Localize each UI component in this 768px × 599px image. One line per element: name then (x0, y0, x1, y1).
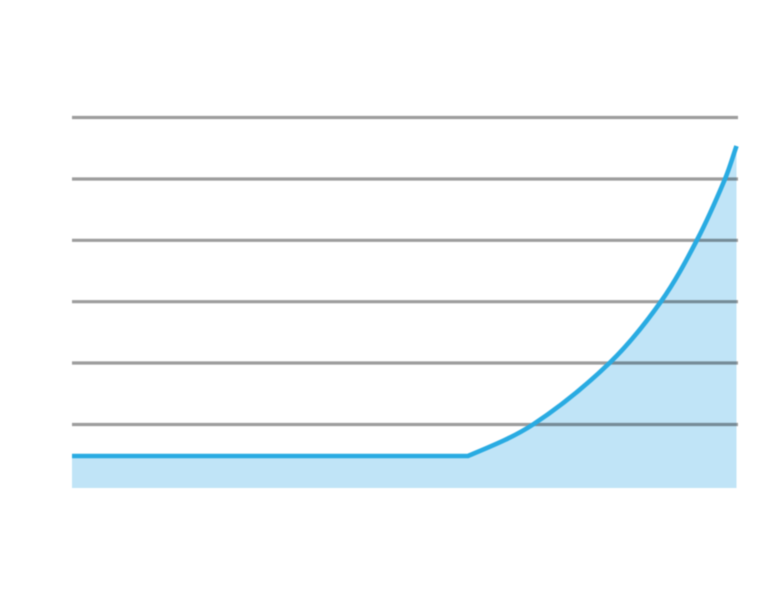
area fill under curve (72, 146, 736, 488)
growth curve line (72, 146, 736, 456)
